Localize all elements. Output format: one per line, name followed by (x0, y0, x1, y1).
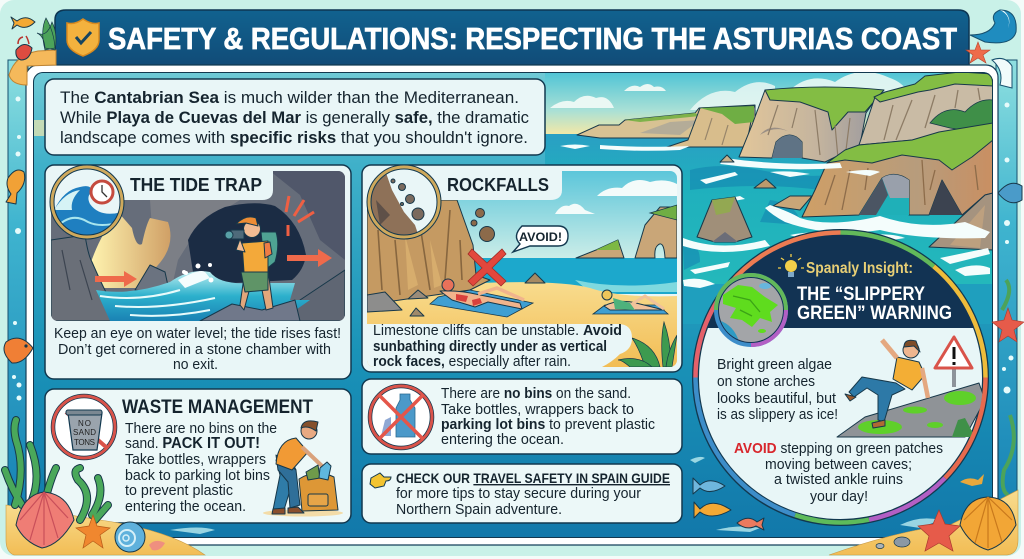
decoration: bottom-right sand, star and shell (829, 490, 1018, 555)
sky (545, 72, 993, 136)
heading: ROCKFALLS (447, 174, 549, 195)
falling man on rock (837, 337, 985, 437)
icon: small fish in sea (693, 474, 984, 530)
panel inner outline (33, 72, 993, 538)
red x (468, 249, 506, 286)
caption: rock faces, especially after rain. (373, 354, 571, 370)
panel: waste management (45, 389, 351, 523)
body text: entering the ocean. (125, 499, 246, 515)
decoration: top-right wave and star (966, 10, 1016, 88)
heading: GREEN” WARNING (797, 303, 952, 324)
panel: slippery green warning (690, 225, 1000, 522)
panel: ocean and coast scene (33, 72, 993, 538)
darker water bands (683, 166, 830, 270)
heading: THE “SLIPPERY (797, 284, 925, 305)
body text: Take bottles, wrappers (125, 452, 266, 468)
callout: avoid: AVOID! (519, 230, 562, 244)
rainbow ring (696, 232, 986, 522)
icon: green algae (715, 274, 787, 346)
panel: no bins (362, 379, 682, 454)
rocks falling (471, 208, 494, 242)
icon: pointing hand (370, 473, 391, 488)
caption: Don’t get cornered in a stone chamber with (58, 342, 331, 358)
insight label: Spanaly Insight: (806, 260, 913, 277)
sea right (545, 134, 993, 284)
foam (560, 144, 990, 288)
hiker (225, 217, 278, 310)
warning marks (286, 196, 314, 236)
arrow: left (95, 271, 137, 287)
person packing backpack (263, 421, 343, 516)
clouds (550, 72, 908, 110)
panel: travel safety guide (362, 464, 682, 523)
icon: no bins (53, 396, 115, 458)
body text: back to parking lot bins (125, 468, 270, 484)
body text: to prevent plastic (125, 483, 233, 499)
icon: wave and clock (52, 167, 122, 240)
panel: the tide trap (45, 165, 351, 379)
link line: Northern Spain adventure. (396, 502, 562, 518)
decoration: right fish, star and seaweed (992, 183, 1024, 495)
intro text box: While Playa de Cuevas del Mar is generally safe, the dramatic (60, 109, 529, 127)
heading (797, 284, 952, 324)
caption: sunbathing directly under as vertical (373, 339, 607, 355)
text tab (367, 324, 632, 367)
heading: THE TIDE TRAP (130, 174, 262, 195)
link line (396, 470, 670, 518)
body text: Bright green algae (717, 356, 832, 373)
sunbather two (593, 290, 668, 314)
tab: heading (367, 171, 562, 200)
warning text: a twisted ankle ruins (774, 471, 903, 488)
body text: on stone arches (717, 373, 815, 390)
icon: lightbulb (778, 254, 804, 277)
warning text: moving between caves; (765, 456, 912, 473)
sea stack and small rocks (697, 155, 776, 242)
body text: entering the ocean. (441, 432, 564, 448)
warning text: AVOID stepping on green patches (734, 440, 943, 457)
intro text box: landscape comes with specific risks that you shouldn't ignore. (60, 129, 528, 147)
decoration: left fish (4, 170, 33, 363)
intro text box (45, 79, 545, 155)
right water strip (996, 60, 1017, 530)
icon: no bins: NO (78, 419, 91, 428)
caption (373, 323, 622, 370)
caption: Limestone cliffs can be unstable. Avoid (373, 323, 622, 339)
lower sea swirls (170, 457, 940, 534)
water (96, 271, 310, 321)
icon: falling rocks (369, 167, 439, 240)
caption: Keep an eye on water level; the tide rises fast! (54, 326, 341, 342)
decoration: bottom-left sand, shell, star and weeds (5, 420, 205, 555)
body text: is as slippery as ice! (717, 406, 838, 423)
link line: CHECK OUR TRAVEL SAFETY IN SPAIN GUIDE (396, 470, 670, 486)
body text: looks beautiful, but (717, 390, 837, 407)
warning text: your day! (810, 488, 868, 505)
cave illustration (51, 171, 345, 321)
body text: sand. PACK IT OUT! (125, 435, 260, 452)
intro text box: The Cantabrian Sea is much wilder than the Mediterranean. (60, 89, 519, 107)
caption: no exit. (173, 357, 218, 373)
warning text (734, 440, 943, 505)
heading: WASTE MANAGEMENT (122, 396, 313, 418)
icon: no bins: TONS (74, 438, 95, 447)
panel: rockfalls (362, 165, 682, 372)
icon: no bins: SAND (73, 428, 96, 437)
body text (441, 386, 655, 448)
icon: crossed bottle (370, 386, 432, 448)
body text: There are no bins on the (125, 421, 277, 437)
bubbles on side strips (12, 96, 1014, 400)
decoration: top-left sand, crab, fish and weed (9, 17, 56, 85)
sunbather one (430, 279, 533, 317)
body text: Take bottles, wrappers back to (441, 402, 634, 418)
plant (618, 322, 677, 367)
caption (54, 326, 341, 373)
beach illustration (367, 171, 677, 367)
callout: avoid (513, 226, 568, 252)
far headlands (577, 105, 755, 138)
navy header (708, 236, 973, 328)
body text (125, 421, 277, 515)
large arch cliff (739, 87, 884, 162)
body text (717, 356, 838, 423)
icon: shield with check (67, 19, 99, 56)
body text: parking lot bins to prevent plastic (441, 417, 655, 433)
arrow: right (287, 249, 332, 267)
left water strip (8, 60, 28, 530)
mid cliff (667, 106, 754, 147)
header banner (55, 10, 969, 65)
link line: for more tips to stay secure during your (396, 486, 641, 502)
tab: heading (51, 171, 273, 200)
right top cliff (858, 72, 993, 144)
body text: There are no bins on the sand. (441, 386, 631, 402)
foreground arch (773, 123, 993, 250)
